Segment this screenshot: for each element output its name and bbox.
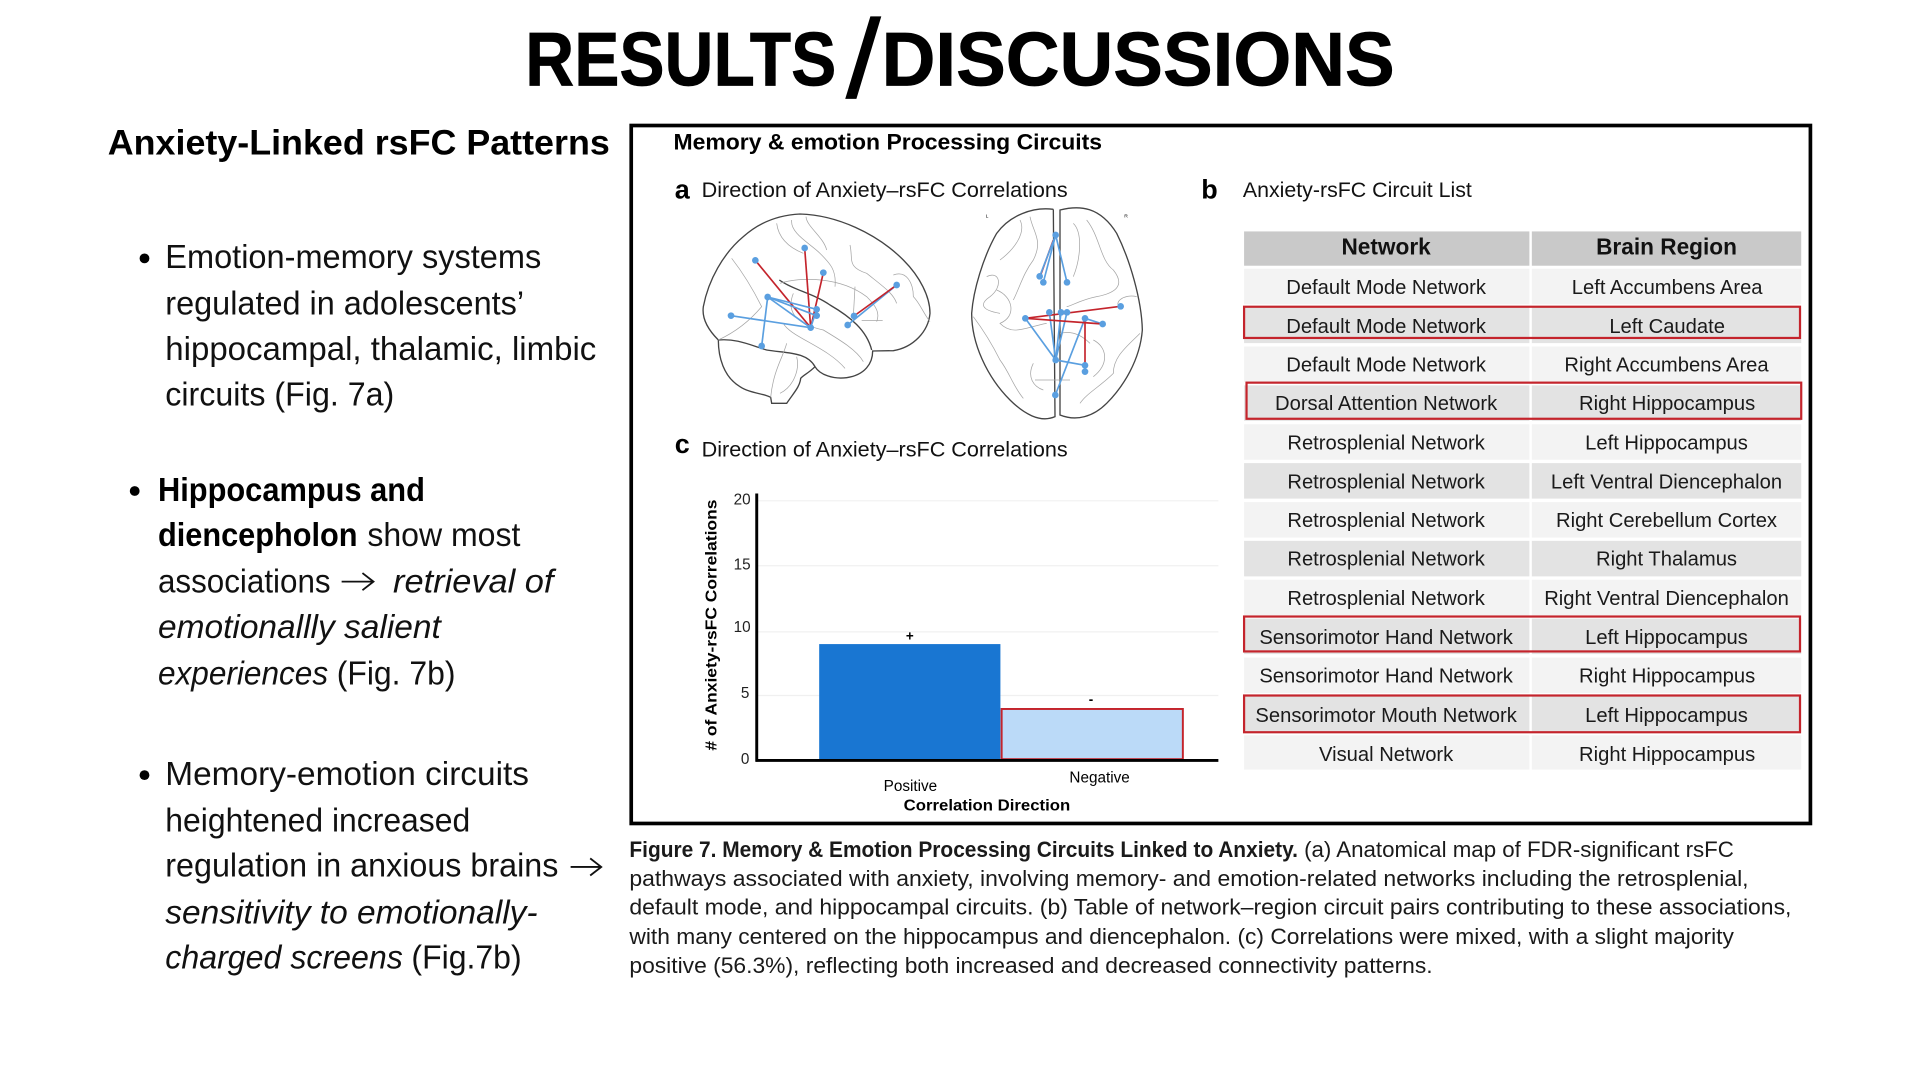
bullet: memory-emotion circuits: sensitivity to emotionally- bbox=[165, 894, 538, 931]
table: circuit list bbox=[1244, 231, 1801, 770]
left column heading: Anxiety-Linked rsFC Patterns bbox=[108, 122, 610, 162]
icon: axial brain map: L bbox=[986, 213, 989, 219]
bullet: hippocampus and diencepholon: diencepholon bbox=[158, 517, 358, 554]
table rows: Left Hippocampus bbox=[1585, 432, 1748, 454]
title: RESULTS bbox=[525, 18, 836, 103]
figure caption: positive (56.3%), reflecting both increased and decreased connectivity patterns. bbox=[629, 953, 1433, 978]
table rows: Right Hippocampus bbox=[1579, 744, 1755, 766]
figure caption: (a) Anatomical map of FDR-significant rsFC bbox=[1304, 837, 1734, 862]
table rows: Left Accumbens Area bbox=[1572, 277, 1763, 299]
bullet: emotion-memory systems: circuits (Fig. 7a) bbox=[165, 376, 394, 413]
y axis tick labels: 20 bbox=[734, 491, 751, 508]
bar chart: correlation direction: - bbox=[1089, 692, 1093, 707]
panel b label: Anxiety-rsFC Circuit List bbox=[1243, 179, 1472, 202]
table rows: Left Hippocampus bbox=[1585, 705, 1748, 727]
red highlight boxes bbox=[1244, 307, 1801, 732]
title: / bbox=[846, 0, 881, 121]
table header: Brain Region bbox=[1596, 234, 1737, 260]
table rows: Sensorimotor Mouth Network bbox=[1255, 705, 1518, 727]
table rows: Sensorimotor Hand Network bbox=[1259, 627, 1514, 649]
figure caption: Figure 7. Memory & Emotion Processing Circuits Linked to Anxiety. bbox=[629, 837, 1298, 862]
bullet: memory-emotion circuits: regulation in anxious brains bbox=[165, 848, 558, 885]
panel a label: a bbox=[675, 174, 691, 204]
panel a label: Direction of Anxiety–rsFC Correlations bbox=[702, 179, 1068, 202]
table rows: Left Ventral Diencephalon bbox=[1551, 472, 1782, 494]
panel a label bbox=[675, 174, 1068, 204]
table rows: Right Thalamus bbox=[1596, 549, 1737, 571]
table rows bbox=[1244, 269, 1801, 770]
title bbox=[525, 0, 1395, 121]
table rows: Right Ventral Diencephalon bbox=[1544, 588, 1789, 610]
bar chart: correlation direction: Correlation Direction bbox=[904, 798, 1070, 815]
bar: positive bbox=[819, 644, 1000, 760]
icon: axial brain map: R bbox=[1124, 213, 1128, 219]
bar: negative bbox=[1002, 709, 1183, 759]
table rows: Right Hippocampus bbox=[1579, 666, 1755, 688]
bullet: emotion-memory systems: Emotion-memory systems bbox=[165, 239, 541, 276]
title: DISCUSSIONS bbox=[882, 18, 1395, 103]
y axis tick labels bbox=[734, 491, 751, 768]
bullet: emotion-memory systems bbox=[140, 239, 596, 413]
table rows: Right Hippocampus bbox=[1579, 393, 1755, 415]
table rows: Dorsal Attention Network bbox=[1275, 393, 1498, 415]
y axis tick labels: 15 bbox=[734, 556, 751, 573]
table header bbox=[1244, 231, 1801, 266]
bullet: memory-emotion circuits: Memory-emotion circuits bbox=[165, 756, 529, 793]
bullet: emotion-memory systems: hippocampal, thalamic, limbic bbox=[165, 331, 596, 368]
table rows: Retrosplenial Network bbox=[1287, 588, 1486, 610]
bar chart: correlation direction: + bbox=[906, 628, 914, 643]
table rows: Retrosplenial Network bbox=[1287, 549, 1486, 571]
bar chart: correlation direction: # of Anxiety-rsFC Correlations bbox=[703, 499, 720, 751]
bullet: hippocampus and diencepholon: show most bbox=[367, 517, 520, 554]
table rows: Right Cerebellum Cortex bbox=[1556, 510, 1777, 532]
y axis tick labels: 5 bbox=[741, 685, 749, 702]
bullet: memory-emotion circuits: (Fig.7b) bbox=[411, 940, 522, 977]
bullet: hippocampus and diencepholon: retrieval of bbox=[393, 564, 557, 601]
panel: figure 7 frame bbox=[631, 126, 1810, 823]
bar chart: correlation direction bbox=[703, 491, 1218, 815]
panel c label: Direction of Anxiety–rsFC Correlations bbox=[702, 439, 1068, 462]
table rows: Right Accumbens Area bbox=[1564, 355, 1769, 377]
figure caption: default mode, and hippocampal circuits. (b) Table of network–region circuit pairs contributing to these associations, bbox=[629, 895, 1791, 920]
bar chart: correlation direction: Negative bbox=[1069, 769, 1130, 786]
icon: sagittal brain map bbox=[703, 214, 930, 403]
table rows: Retrosplenial Network bbox=[1287, 472, 1486, 494]
table header: Network bbox=[1341, 234, 1431, 260]
bullet: hippocampus and diencepholon: (Fig. 7b) bbox=[337, 655, 456, 692]
figure caption bbox=[628, 837, 1791, 978]
bullet: hippocampus and diencepholon: associations bbox=[158, 564, 331, 601]
bullet: hippocampus and diencepholon bbox=[130, 472, 557, 692]
panel b label bbox=[1201, 174, 1472, 204]
panel heading: Memory & emotion Processing Circuits bbox=[673, 129, 1102, 154]
bullet: memory-emotion circuits bbox=[140, 756, 601, 977]
table rows: Retrosplenial Network bbox=[1287, 432, 1486, 454]
panel c label: c bbox=[675, 429, 690, 459]
bar chart: correlation direction: Positive bbox=[884, 778, 937, 795]
bullet: emotion-memory systems: regulated in adolescents’ bbox=[165, 286, 524, 323]
y axis tick labels: 10 bbox=[734, 619, 751, 636]
icon: axial brain map bbox=[972, 208, 1142, 419]
bullet: hippocampus and diencepholon: Hippocampus and bbox=[158, 472, 425, 509]
table rows: Default Mode Network bbox=[1286, 277, 1487, 299]
panel c label bbox=[675, 429, 1068, 462]
panel b label: b bbox=[1201, 174, 1218, 204]
figure caption: with many centered on the hippocampus and diencephalon. (c) Correlations were mixed, with a slight majority bbox=[628, 924, 1734, 949]
y axis tick labels: 0 bbox=[741, 751, 749, 768]
table rows: Sensorimotor Hand Network bbox=[1259, 666, 1514, 688]
bullet: memory-emotion circuits: charged screens bbox=[165, 940, 403, 977]
table rows: Retrosplenial Network bbox=[1287, 510, 1486, 532]
bullet: hippocampus and diencepholon: experiences bbox=[158, 655, 328, 692]
table rows: Visual Network bbox=[1319, 744, 1454, 766]
figure caption: pathways associated with anxiety, involving memory- and emotion-related networks including the retrosplenial, bbox=[629, 866, 1749, 891]
bullet: hippocampus and diencepholon: emotionallly salient bbox=[158, 609, 443, 646]
table rows: Left Hippocampus bbox=[1585, 627, 1748, 649]
table rows: Left Caudate bbox=[1609, 316, 1725, 338]
bullet: memory-emotion circuits: heightened increased bbox=[165, 802, 470, 839]
table rows: Default Mode Network bbox=[1286, 355, 1487, 377]
table rows: Default Mode Network bbox=[1286, 316, 1487, 338]
